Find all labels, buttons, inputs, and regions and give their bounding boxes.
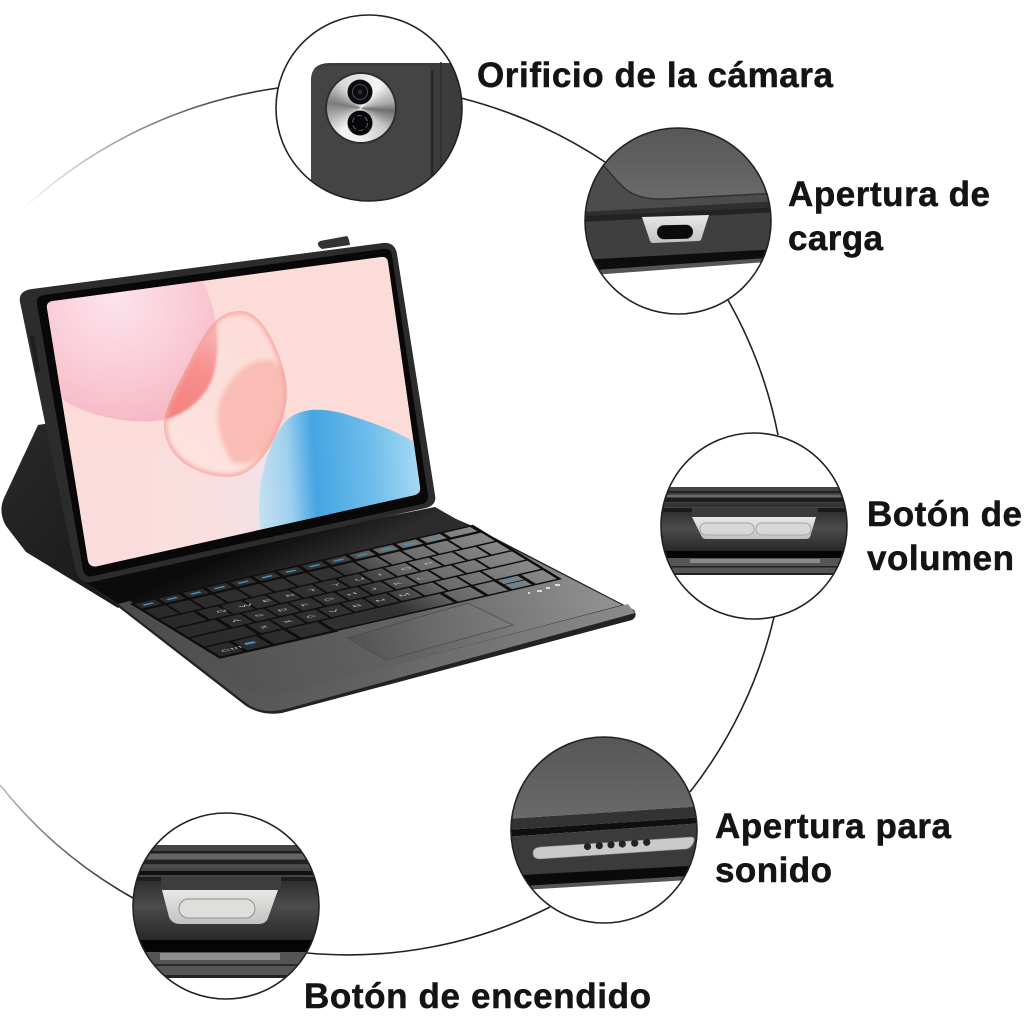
- key legends: R: [284, 593, 297, 598]
- screen wallpaper: [46, 256, 420, 566]
- USB-C port: [657, 225, 693, 239]
- key legends: S: [253, 613, 266, 618]
- label: charging: Apertura de: [788, 175, 990, 214]
- volume up key: [700, 523, 754, 535]
- backlit function glyphs: [142, 535, 523, 654]
- label: charging: [788, 175, 990, 258]
- key legends: O: [400, 566, 414, 571]
- lower black band: [594, 250, 766, 270]
- upper ridges: [655, 487, 855, 508]
- key legends: T: [307, 588, 319, 592]
- charging circle outline: [585, 128, 771, 314]
- label: volume: [867, 495, 1022, 578]
- camera circle outline: [276, 15, 462, 201]
- key legends: H: [346, 592, 359, 596]
- key legends: Q: [215, 609, 229, 614]
- button recess: [162, 890, 278, 924]
- key legends: B: [351, 604, 364, 608]
- side slot: [30, 335, 40, 373]
- key legends: L: [415, 576, 427, 580]
- translucent coral droplet: [164, 311, 287, 477]
- key legends: E: [261, 599, 274, 603]
- key legends: K: [392, 581, 405, 586]
- speaker holes: [584, 839, 650, 850]
- tablet frame: [20, 243, 435, 582]
- status lights: [528, 584, 560, 594]
- key legends: C: [305, 614, 318, 619]
- lower ridges: [140, 940, 312, 952]
- power circle outline: [133, 813, 319, 999]
- folding stand: [1, 420, 160, 608]
- key legends: X: [282, 620, 295, 624]
- volume down key: [756, 523, 811, 535]
- top face: [512, 738, 694, 818]
- label: volume: Botón de: [867, 495, 1022, 534]
- lower ridges: [665, 551, 843, 558]
- key legends: Z: [259, 625, 271, 629]
- callout: volume button: [662, 487, 846, 575]
- button recess: [692, 517, 816, 539]
- label: volume: volumen: [867, 539, 1014, 578]
- top face: [604, 129, 766, 200]
- case back: [311, 63, 462, 174]
- volume circle outline: [661, 433, 847, 619]
- upper ridges: [138, 845, 314, 877]
- lower lens: [348, 110, 372, 136]
- key legends: P: [423, 561, 436, 566]
- blue shape: [259, 410, 420, 530]
- side body: [662, 512, 846, 551]
- key legends: U: [353, 577, 367, 582]
- speaker circle outline: [511, 737, 697, 923]
- trackpad: [347, 603, 513, 660]
- camera plate: [325, 72, 397, 144]
- key legends: [172, 561, 483, 653]
- keyboard keys: [130, 525, 563, 659]
- callout: speaker opening: [512, 738, 696, 890]
- key legends: D: [276, 608, 290, 612]
- side body: [512, 824, 696, 875]
- label: charging: carga: [788, 219, 884, 258]
- label: power: Botón de encendido: [304, 977, 651, 1016]
- screen bezel: [37, 249, 428, 576]
- label: sound: [715, 807, 952, 890]
- speaker strip: [533, 837, 694, 859]
- side body: [134, 881, 318, 940]
- label: sound: Apertura para: [715, 807, 952, 846]
- charging port surround: [642, 215, 709, 243]
- callout: charging opening: [586, 128, 770, 274]
- callout: power button: [134, 845, 318, 978]
- seam: [586, 202, 770, 216]
- key legends: I: [376, 573, 384, 576]
- callout: camera opening: [311, 62, 462, 200]
- key legends: W: [238, 603, 255, 608]
- keyboard base: [78, 507, 636, 714]
- key legends: G: [322, 597, 337, 602]
- upper lens: [348, 80, 372, 104]
- key legends: J: [369, 587, 379, 591]
- power key: [179, 899, 255, 918]
- edge bands: [512, 806, 696, 830]
- key legends: Ctrl: [220, 646, 244, 653]
- key legends: V: [328, 609, 341, 613]
- side body: [586, 208, 770, 260]
- connecting ring: [0, 88, 778, 955]
- key legends: A: [230, 619, 243, 623]
- pink sphere: [46, 281, 216, 422]
- stylus loop: [318, 236, 350, 249]
- label: sound: sonido: [715, 851, 832, 890]
- tablet with keyboard case: [1, 236, 636, 714]
- label: camera: Orificio de la cámara: [477, 56, 834, 95]
- key legends: F: [299, 603, 311, 607]
- key legends: M: [397, 593, 412, 597]
- key legends: Y: [330, 583, 343, 587]
- key legends: N: [374, 598, 387, 603]
